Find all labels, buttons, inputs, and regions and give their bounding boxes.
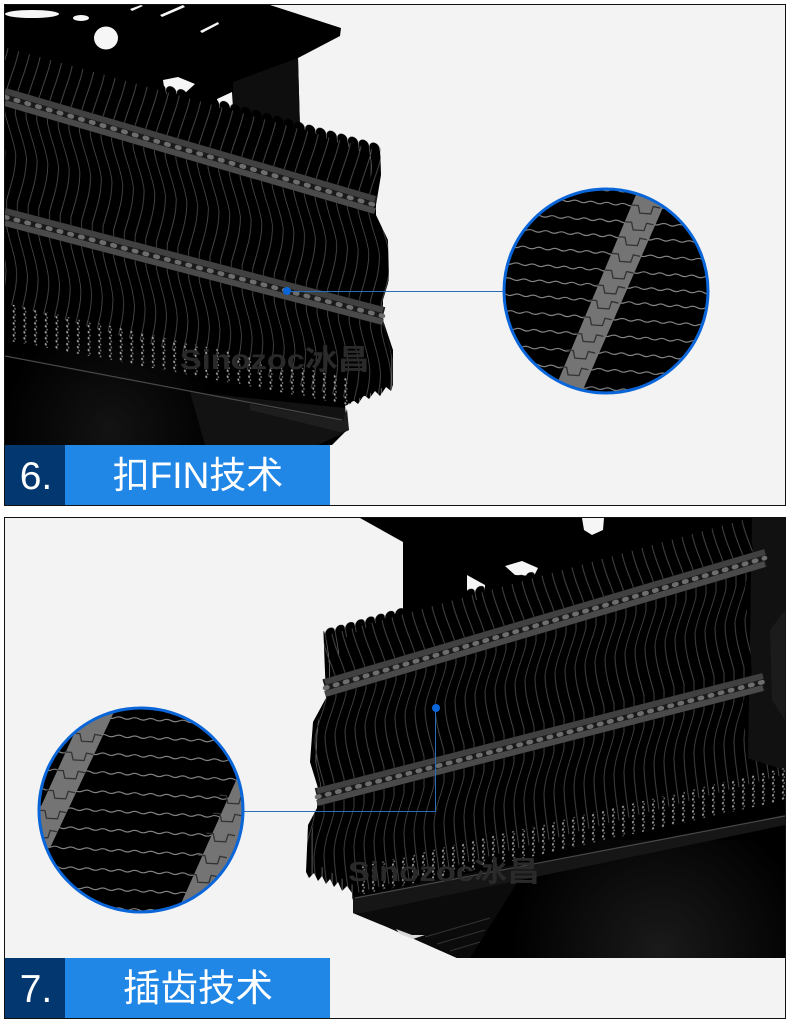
lower fin band [317, 676, 763, 803]
heatsink photo with clipped fins [0, 0, 400, 445]
label: 7. 插齿技术: 插齿技术 [123, 967, 273, 1009]
panel: 6. FIN clip technology [0, 0, 786, 506]
callout line and dot: insert tooth [244, 704, 440, 812]
heatsink photo with inserted fins [300, 518, 785, 958]
watermark: Sinozoc冰昌 [348, 856, 540, 887]
label: 6. 扣FIN技术 [5, 445, 330, 505]
panel: 7. insert-tooth technology [4, 518, 786, 1018]
upper fin band [325, 552, 765, 694]
magnified circle: FIN clip detail [502, 188, 710, 394]
lower fin band [5, 211, 383, 322]
label: 7. 插齿技术: 7. [20, 968, 52, 1011]
callout line and dot: FIN clip [283, 287, 504, 295]
magnified circle: insert-tooth detail [38, 706, 244, 914]
label: 6. 扣FIN技术: 6. [20, 455, 52, 498]
upper fin band [5, 91, 375, 211]
label: 7. 插齿技术 [5, 958, 330, 1018]
watermark: Sinozoc冰昌 [180, 344, 370, 375]
label: 6. 扣FIN技术: 扣FIN技术 [113, 455, 283, 496]
